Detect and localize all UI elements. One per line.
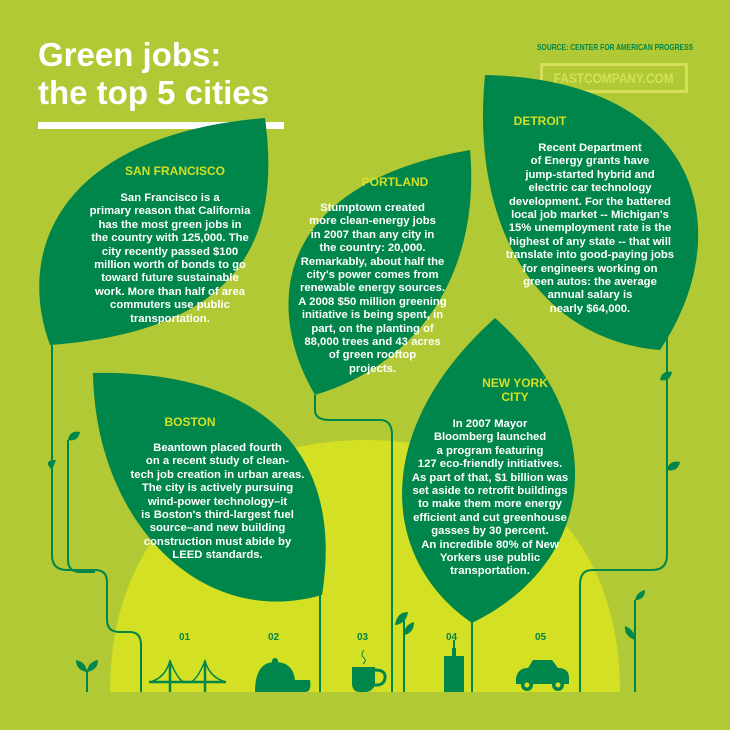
text: NEW YORK bbox=[482, 376, 548, 390]
text: Recent Department bbox=[538, 142, 642, 154]
text: the country: 20,000. bbox=[319, 242, 426, 254]
text: jump-started hybrid and bbox=[525, 169, 655, 181]
yellow sun semicircle bbox=[110, 440, 620, 692]
title: the top 5 cities bbox=[38, 74, 269, 111]
text: to make them more energy bbox=[418, 498, 562, 510]
leaf: new york bbox=[402, 318, 575, 623]
title bbox=[38, 36, 269, 111]
text: on a recent study of clean- bbox=[146, 455, 289, 467]
icon: bridge bbox=[149, 661, 226, 692]
text: 88,000 trees and 43 acres bbox=[304, 336, 441, 348]
text: more clean-energy jobs bbox=[309, 215, 436, 227]
text: local job market -- Michigan's bbox=[511, 209, 669, 221]
text: LEED standards. bbox=[172, 549, 263, 561]
text: 04 bbox=[446, 632, 457, 643]
text: initiative is being spent, in bbox=[302, 309, 443, 321]
text: the country with 125,000. The bbox=[91, 232, 249, 244]
text: annual salary is bbox=[548, 289, 632, 301]
title: Green jobs: bbox=[38, 36, 221, 73]
text: highest of any state -- that will bbox=[509, 236, 671, 248]
text: transportation. bbox=[450, 565, 530, 577]
leaf: boston bbox=[93, 373, 326, 602]
text: renewable energy sources. bbox=[300, 282, 445, 294]
text: San Francisco is a bbox=[120, 192, 220, 204]
text: The city is actively pursuing bbox=[142, 482, 293, 494]
text: 02 bbox=[268, 632, 279, 643]
text: commuters use public bbox=[110, 299, 230, 311]
source: SOURCE: CENTER FOR AMERICAN PROGRESS bbox=[537, 42, 693, 52]
leaf: san francisco bbox=[39, 118, 268, 345]
text: As part of that, $1 billion was bbox=[412, 472, 568, 484]
text: nearly $64,000. bbox=[550, 303, 630, 315]
text: of green rooftop bbox=[329, 349, 416, 361]
fastcompany logo: FASTCOMPANY.COM bbox=[554, 70, 674, 86]
text: 01 bbox=[179, 632, 190, 643]
text: efficient and cut greenhouse bbox=[413, 512, 567, 524]
text: tech job creation in urban areas. bbox=[131, 469, 304, 481]
panel: detroit bbox=[506, 114, 674, 315]
text: has the most green jobs in bbox=[98, 219, 242, 231]
text: 05 bbox=[535, 632, 546, 643]
panel: san francisco bbox=[90, 164, 250, 325]
text: CITY bbox=[501, 390, 529, 404]
text: transportation. bbox=[130, 313, 210, 325]
text: wind-power technology–it bbox=[148, 496, 287, 508]
text: Yorkers use public bbox=[440, 552, 540, 564]
text: toward future sustainable bbox=[101, 272, 239, 284]
text: city recently passed $100 bbox=[102, 246, 238, 258]
text: An incredible 80% of New bbox=[421, 539, 559, 551]
text: green autos: the average bbox=[523, 276, 657, 288]
text: electric car technology bbox=[528, 182, 652, 194]
leaf: portland bbox=[288, 150, 471, 395]
text: of Energy grants have bbox=[531, 155, 649, 167]
text: city's power comes from bbox=[306, 269, 439, 281]
icon: cup bbox=[352, 650, 385, 692]
panel: boston bbox=[130, 415, 304, 561]
title underline bbox=[38, 122, 284, 129]
text: PORTLAND bbox=[362, 175, 428, 189]
text: set aside to retrofit buildings bbox=[412, 485, 568, 497]
text: a program featuring bbox=[437, 445, 543, 457]
leaf: detroit bbox=[483, 75, 698, 350]
text: primary reason that California bbox=[90, 205, 250, 217]
text: million worth of bonds to go bbox=[94, 259, 246, 271]
text: Stumptown created bbox=[320, 202, 425, 214]
text: DETROIT bbox=[514, 114, 566, 128]
text: 15% unemployment rate is the bbox=[509, 222, 671, 234]
text: projects. bbox=[349, 363, 396, 375]
text: 127 eco-friendly initiatives. bbox=[418, 458, 562, 470]
small leaves bbox=[68, 432, 80, 440]
text: Remarkably, about half the bbox=[301, 256, 444, 268]
text: In 2007 Mayor bbox=[453, 418, 527, 430]
numbers bbox=[179, 632, 546, 643]
panel: new york bbox=[412, 376, 568, 577]
fastcompany logo bbox=[540, 63, 688, 93]
text: in 2007 than any city in bbox=[311, 229, 434, 241]
icon: building bbox=[444, 640, 464, 692]
text: BOSTON bbox=[164, 415, 216, 429]
text: work. More than half of area bbox=[95, 286, 245, 298]
text: Beantown placed fourth bbox=[153, 442, 282, 454]
text: is Boston's third-largest fuel bbox=[141, 509, 294, 521]
text: development. For the battered bbox=[509, 196, 671, 208]
text: source–and new building bbox=[150, 522, 285, 534]
text: gasses by 30 percent. bbox=[431, 525, 549, 537]
text: construction must abide by bbox=[144, 536, 291, 548]
text: part, on the planting of bbox=[311, 323, 434, 335]
text: translate into good-paying jobs bbox=[506, 249, 674, 261]
text: 03 bbox=[357, 632, 368, 643]
icon: cap bbox=[255, 658, 310, 692]
text: SAN FRANCISCO bbox=[125, 164, 225, 178]
text: Bloomberg launched bbox=[434, 431, 546, 443]
text: A 2008 $50 million greening bbox=[298, 296, 447, 308]
icon: car bbox=[516, 660, 569, 691]
panel: portland bbox=[298, 175, 447, 375]
text: for engineers working on bbox=[523, 263, 657, 275]
